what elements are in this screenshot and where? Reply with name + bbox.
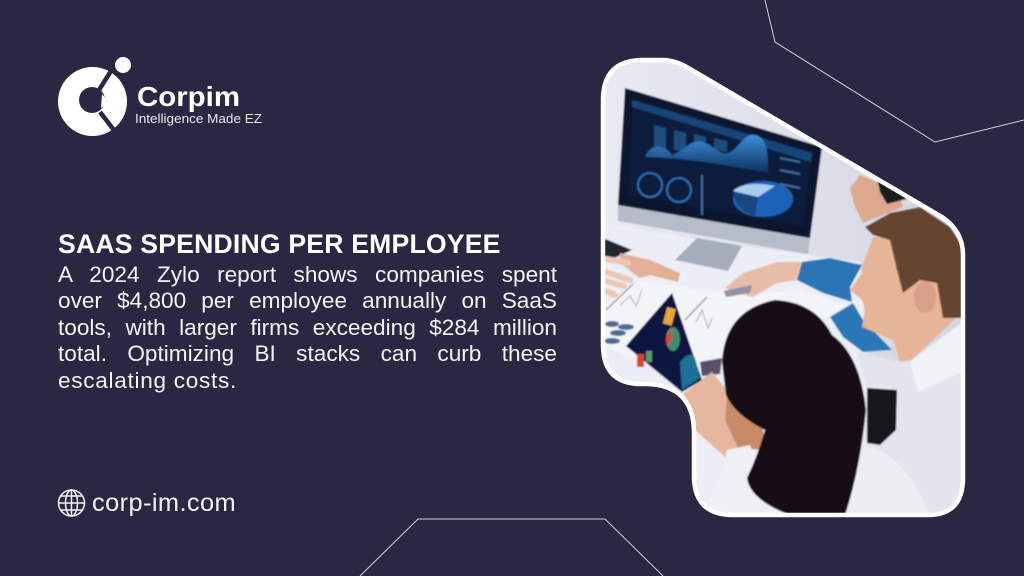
body text: over $4,800 per employee annually on SaaS <box>58 288 557 313</box>
logo tagline: Intelligence Made EZ <box>135 111 262 126</box>
body text: escalating costs. <box>58 368 237 393</box>
photo white border <box>603 60 963 515</box>
woman with dark ponytail <box>683 300 930 515</box>
papers on table <box>605 283 810 377</box>
body text: total. Optimizing BI stacks can curb these <box>58 341 557 366</box>
logo <box>58 57 262 136</box>
tablet <box>626 293 702 392</box>
man in white shirt <box>850 207 965 520</box>
table surface <box>674 238 868 512</box>
logo wordmark: Corpim <box>137 81 240 112</box>
icon: monitor <box>618 88 822 271</box>
panel: photo of team reviewing dashboards <box>600 58 966 518</box>
body text: tools, with larger firms exceeding $284 million <box>58 315 557 340</box>
left colleague arm and hand <box>603 238 680 295</box>
heading: SAAS SPENDING PER EMPLOYEE <box>58 229 501 259</box>
body text <box>58 262 557 393</box>
body text: A 2024 Zylo report shows companies spent <box>58 262 557 287</box>
second colleague <box>850 175 910 223</box>
website url: corp-im.com <box>92 489 236 517</box>
blue sleeve arm <box>724 258 892 352</box>
icon: logo mark <box>58 57 131 136</box>
